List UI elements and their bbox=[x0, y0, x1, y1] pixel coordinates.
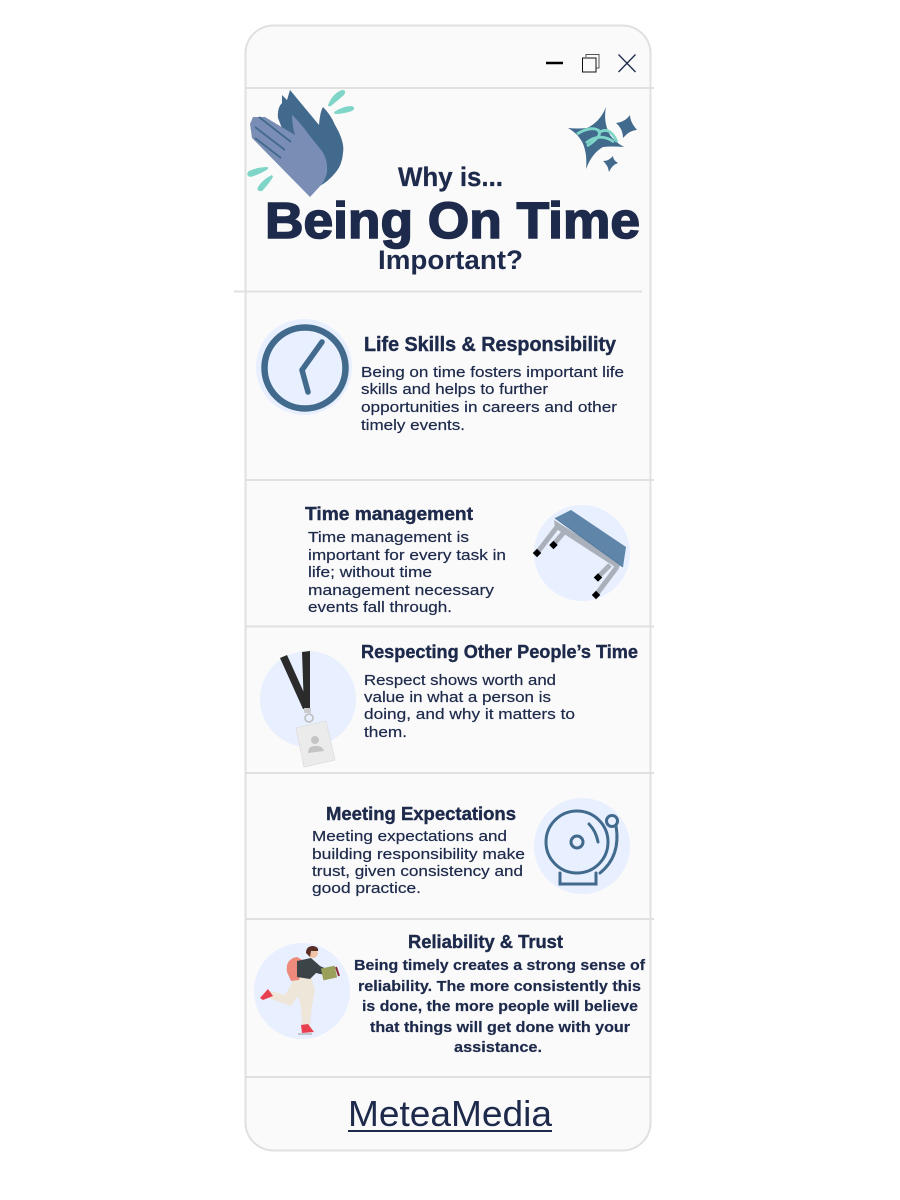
title: Important? bbox=[378, 245, 523, 275]
body text bbox=[361, 364, 624, 434]
heading: Reliability & Trust bbox=[408, 932, 563, 952]
body text: events fall through. bbox=[308, 599, 452, 616]
body text: Being on time fosters important life bbox=[361, 364, 624, 381]
panel: respecting other people's time bbox=[260, 642, 638, 767]
title bbox=[265, 162, 640, 275]
icon: sparkles bbox=[568, 107, 637, 172]
body text bbox=[312, 828, 525, 897]
title: Being On Time bbox=[265, 192, 640, 249]
body text: building responsibility make bbox=[312, 846, 525, 863]
heading: Time management bbox=[305, 504, 473, 524]
icon: clock bbox=[256, 319, 352, 415]
body text: that things will get done with your bbox=[370, 1019, 630, 1036]
window panel bbox=[234, 26, 654, 1150]
icon: lanyard badge bbox=[260, 651, 356, 767]
panel: reliability and trust bbox=[254, 932, 646, 1056]
body text: timely events. bbox=[361, 417, 465, 434]
heading: Meeting Expectations bbox=[326, 804, 516, 824]
icon: desk bbox=[533, 505, 630, 601]
heading: Respecting Other People’s Time bbox=[361, 642, 638, 662]
body text: good practice. bbox=[312, 880, 421, 897]
body text: reliability. The more consistently this bbox=[358, 978, 641, 995]
panel: meeting expectations bbox=[312, 798, 630, 897]
body text: Meeting expectations and bbox=[312, 828, 507, 845]
body text: opportunities in careers and other bbox=[361, 399, 617, 416]
footer brand: MeteaMedia bbox=[348, 1093, 553, 1134]
body text: is done, the more people will believe bbox=[362, 998, 638, 1015]
body text: value in what a person is bbox=[364, 689, 551, 706]
body text: management necessary bbox=[308, 582, 495, 599]
body text: doing, and why it matters to bbox=[364, 706, 575, 723]
body text: Respect shows worth and bbox=[364, 672, 556, 689]
body text bbox=[364, 672, 575, 741]
illustration: running person bbox=[254, 943, 350, 1039]
title: Why is... bbox=[398, 162, 503, 192]
body text: trust, given consistency and bbox=[312, 863, 523, 880]
body text: assistance. bbox=[454, 1039, 542, 1056]
window controls bbox=[546, 54, 636, 72]
body text: important for every task in bbox=[308, 547, 506, 564]
panel: life skills and responsibility bbox=[256, 319, 624, 434]
body text: Time management is bbox=[308, 529, 469, 546]
heading: Life Skills & Responsibility bbox=[364, 334, 617, 356]
body text bbox=[354, 957, 646, 1056]
panel: time management bbox=[305, 504, 630, 616]
body text: them. bbox=[364, 724, 407, 741]
icon: bell bbox=[534, 798, 630, 894]
body text: skills and helps to further bbox=[361, 381, 548, 398]
icon: clapping hands bbox=[247, 90, 354, 197]
body text: life; without time bbox=[308, 564, 432, 581]
body text: Being timely creates a strong sense of bbox=[354, 957, 646, 974]
body text bbox=[308, 529, 506, 616]
